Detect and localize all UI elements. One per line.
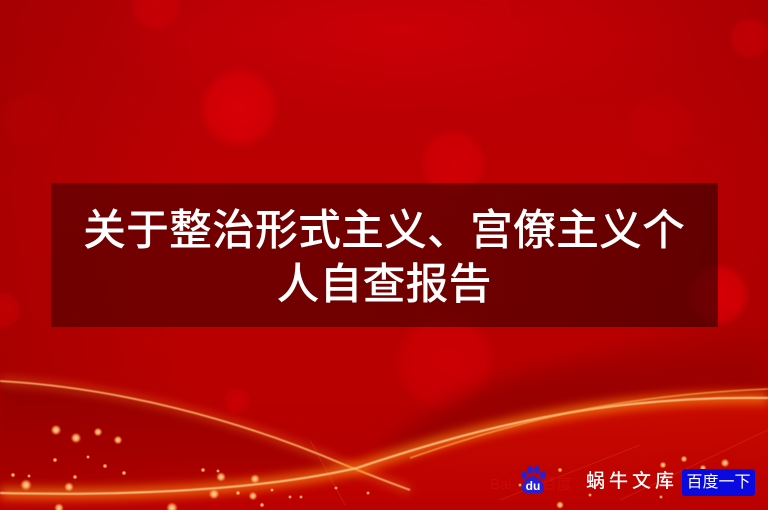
button <box>682 469 755 496</box>
faint logo wordmark: Bai 百度 <box>490 476 572 493</box>
icon: paw logo: du <box>526 479 540 493</box>
icon: paw logo <box>521 466 546 494</box>
button: 百度一下 <box>686 474 750 491</box>
title line 2: 人自查报告 <box>276 261 492 309</box>
title panel <box>50 183 718 327</box>
golden sparkle dots <box>10 424 730 510</box>
title line 1: 关于整治形式主义、宫僚主义个 <box>83 207 685 255</box>
brand text: 蜗牛文库 <box>586 471 678 492</box>
dark band and glowing streaks <box>0 320 768 510</box>
